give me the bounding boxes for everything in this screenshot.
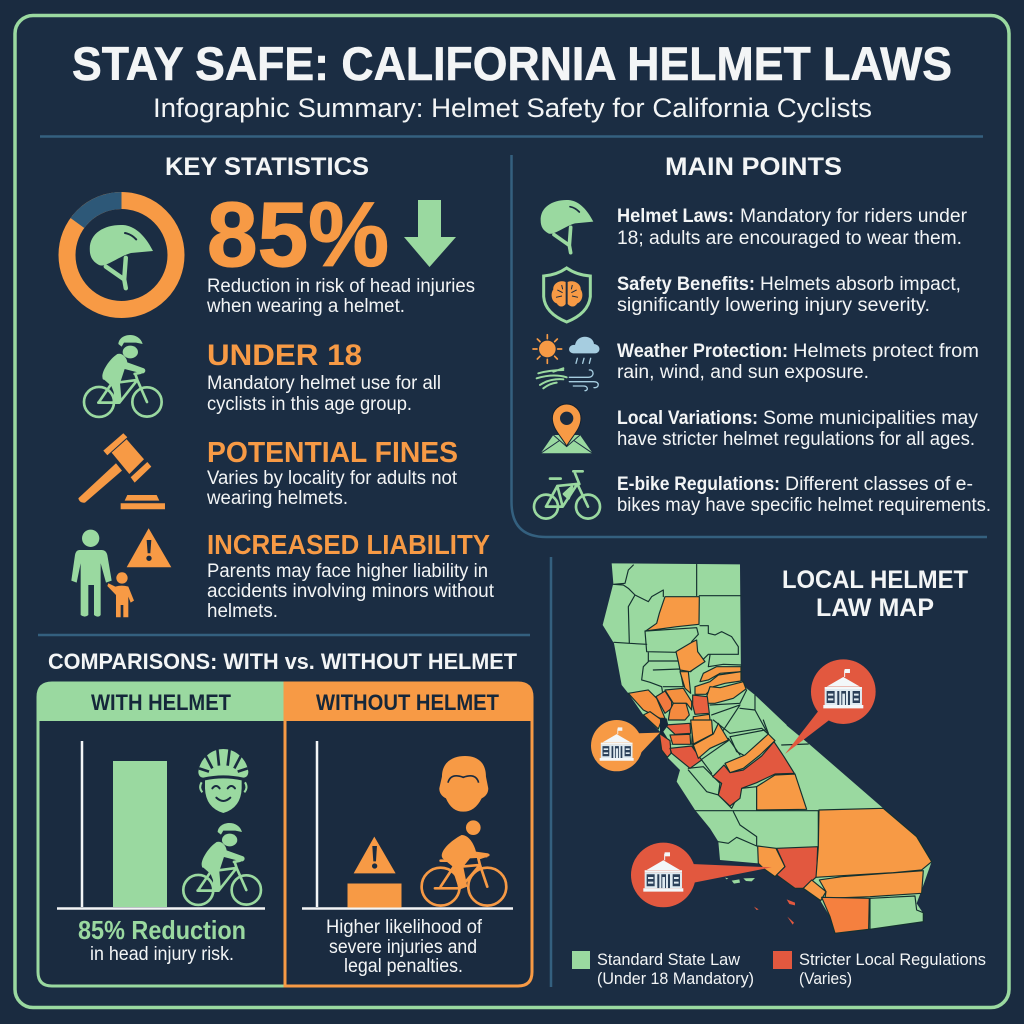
header: with helmet xyxy=(38,683,285,721)
point: weather protection xyxy=(617,341,979,383)
text: higher likelihood xyxy=(326,917,483,977)
callout: orange bay area xyxy=(591,720,660,771)
point: local variations: Some municipalities may xyxy=(763,408,979,429)
text: liability description: accidents involving minors without xyxy=(207,581,495,602)
column: without helmet xyxy=(285,683,532,986)
text: 85% description: Reduction in risk of head injuries xyxy=(207,276,475,297)
icon: cyclist with helmet xyxy=(183,823,261,905)
text: fines description: wearing helmets. xyxy=(206,488,348,509)
text: under 18 description xyxy=(207,373,441,415)
point: helmet laws: Helmet Laws: xyxy=(617,206,734,227)
callout: red los angeles xyxy=(631,843,772,907)
text: higher likelihood: legal penalties. xyxy=(344,956,463,977)
point: helmet laws xyxy=(617,206,968,249)
icon: warning triangle xyxy=(354,837,396,873)
text: in head injury risk: in head injury risk. xyxy=(90,944,234,965)
text: higher likelihood: Higher likelihood of xyxy=(326,917,483,938)
text: under 18 description: cyclists in this age group. xyxy=(207,394,412,415)
panel: local helmet law map xyxy=(572,563,986,988)
point: safety benefits xyxy=(617,274,961,316)
legend: standard state law xyxy=(572,950,754,988)
title: STAY SAFE: CALIFORNIA HELMET LAWS xyxy=(72,37,952,90)
icon: shield with brain xyxy=(544,268,590,322)
callout: red central valley xyxy=(785,659,876,754)
text: liability description: Parents may face higher liability in xyxy=(207,561,488,582)
heading: local helmet law map xyxy=(782,566,968,622)
heading: key statistics: KEY STATISTICS xyxy=(165,153,369,181)
text: fines description xyxy=(206,468,458,509)
heading: main points: MAIN POINTS xyxy=(665,153,842,181)
point: safety benefits: Helmets absorb impact, xyxy=(760,274,961,295)
point: weather protection: rain, wind, and sun exposure. xyxy=(617,362,869,383)
icon: smiling face with helmet xyxy=(198,749,248,813)
text: higher likelihood: severe injuries and xyxy=(329,937,477,958)
donut chart: 85 percent xyxy=(67,200,176,310)
legend: stricter local regulations xyxy=(773,950,986,988)
icon: down arrow xyxy=(404,200,456,267)
point: local variations: have stricter helmet regulations for all ages. xyxy=(617,429,975,450)
header: without helmet xyxy=(285,683,532,721)
text: under 18 description: Mandatory helmet use for all xyxy=(207,373,441,394)
legend: stricter local regulations: (Varies) xyxy=(799,969,852,988)
point: e-bike regulations xyxy=(617,474,991,516)
legend: stricter local regulations: Stricter Local Regulations xyxy=(799,950,986,969)
point: local variations xyxy=(617,408,979,450)
text: 85% reduction: 85% Reduction xyxy=(78,915,246,945)
point: safety benefits: Safety Benefits: xyxy=(617,274,755,295)
heading: local helmet law map: LOCAL HELMET xyxy=(782,566,968,594)
heading: under 18: UNDER 18 xyxy=(207,339,362,372)
point: local variations: Local Variations: xyxy=(617,408,758,429)
text: liability description: helmets. xyxy=(207,601,278,622)
point: safety benefits: significantly lowering injury severity. xyxy=(617,295,930,316)
point: e-bike regulations: E-bike Regulations: xyxy=(617,474,780,495)
icon: gavel xyxy=(78,433,165,509)
text: fines description: Varies by locality for adults not xyxy=(207,468,458,489)
bar chart: with helmet xyxy=(57,741,265,908)
heading: local helmet law map: LAW MAP xyxy=(816,594,934,622)
point: weather protection: Weather Protection: xyxy=(617,341,788,362)
panel: key statistics xyxy=(67,153,495,622)
icon: cyclist without helmet xyxy=(422,820,506,906)
panel: comparisons xyxy=(38,649,532,986)
icon: helmet xyxy=(541,200,593,253)
heading: potential fines: POTENTIAL FINES xyxy=(207,437,458,469)
heading: comparisons: COMPARISONS: WITH vs. WITHOUT HELMET xyxy=(48,649,518,674)
icon: e-bike xyxy=(534,471,600,519)
bar chart: without helmet xyxy=(302,741,513,908)
map: california counties xyxy=(603,563,932,933)
point: e-bike regulations: Different classes of e- xyxy=(785,474,973,495)
point: e-bike regulations: bikes may have specific helmet requirements. xyxy=(617,495,991,516)
icon: map pin xyxy=(541,404,593,453)
heading: increased liability: INCREASED LIABILITY xyxy=(207,529,490,560)
stat: 85%: 85% xyxy=(207,184,389,286)
icon: head without helmet xyxy=(439,756,488,812)
legend: standard state law: (Under 18 Mandatory) xyxy=(597,969,754,988)
icon: weather xyxy=(533,335,599,391)
header: with helmet: WITH HELMET xyxy=(91,690,232,715)
point: helmet laws: 18; adults are encouraged to wear them. xyxy=(617,228,962,249)
icon: parent and child with warning xyxy=(71,528,171,617)
column: with helmet xyxy=(38,683,285,986)
text: 85% description xyxy=(206,276,475,317)
icon: young cyclist xyxy=(84,335,162,417)
text: liability description xyxy=(207,561,495,622)
text: 85% description: when wearing a helmet. xyxy=(206,296,405,317)
point: helmet laws: Mandatory for riders under xyxy=(740,206,968,227)
panel: main points xyxy=(533,153,991,519)
header: without helmet: WITHOUT HELMET xyxy=(316,690,500,715)
subtitle: Infographic Summary: Helmet Safety for California Cyclists xyxy=(153,93,872,123)
legend: standard state law: Standard State Law xyxy=(597,950,741,969)
point: weather protection: Helmets protect from xyxy=(793,341,979,362)
